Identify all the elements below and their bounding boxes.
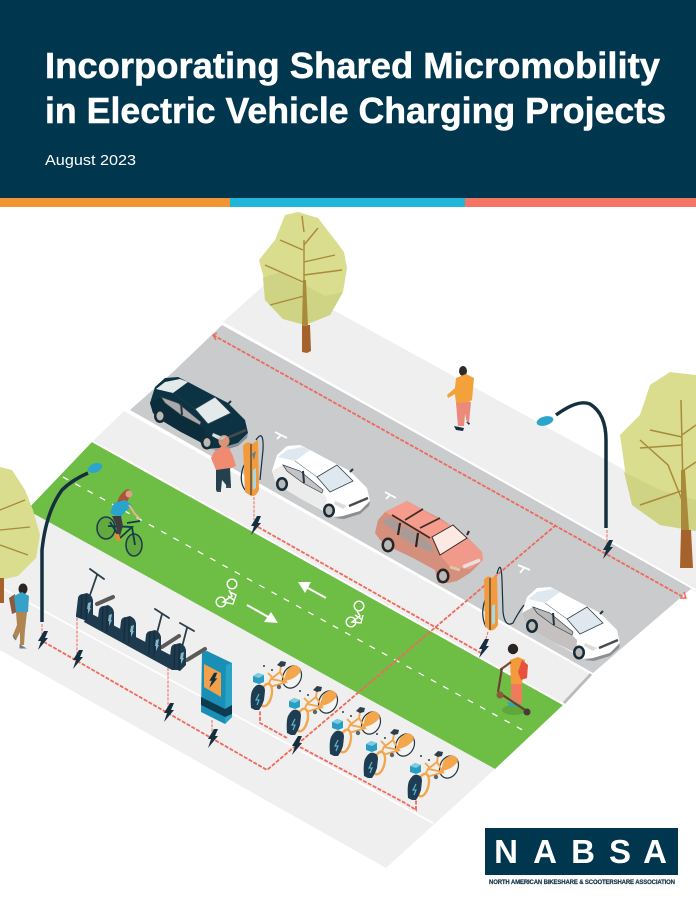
- logo: NABSA: S: [609, 833, 631, 870]
- tree top: [259, 212, 347, 353]
- charger left: [241, 436, 263, 496]
- bolts: [38, 516, 613, 755]
- middle sidewalk: [93, 411, 592, 704]
- far sidewalk: [223, 277, 696, 592]
- colour stripe: [0, 198, 696, 207]
- title: Incorporating Shared Micromobility: [45, 45, 660, 86]
- bike share docks: [251, 661, 462, 800]
- title: in Electric Vehicle Charging Projects: [45, 90, 666, 131]
- scooter poles and bars: [90, 569, 205, 660]
- charging sign: [201, 651, 232, 724]
- logo: NABSA: [485, 828, 678, 886]
- car white: [272, 445, 370, 519]
- street scene: [0, 212, 696, 868]
- logo tagline: NORTH AMERICAN BIKESHARE & SCOOTERSHARE ASSOCIATION: [489, 880, 675, 886]
- car silver charging: [522, 587, 620, 661]
- van: [375, 501, 483, 584]
- car navy: [150, 377, 248, 451]
- header banner: [0, 0, 696, 198]
- bike lane symbols and arrows: [216, 579, 364, 627]
- logo: NABSA: B: [571, 833, 595, 870]
- street lamp right: [536, 403, 606, 528]
- person pink shirt: [211, 435, 236, 492]
- title: [45, 45, 666, 131]
- logo: NABSA: A: [533, 833, 557, 870]
- cyclist: [97, 489, 142, 556]
- roadway: [130, 325, 693, 673]
- bike lane: [27, 442, 563, 769]
- tree right: [620, 372, 696, 568]
- street lamp left: [42, 461, 104, 622]
- scooter rider: [496, 644, 530, 716]
- tree left: [0, 467, 40, 603]
- person with backpack: [9, 584, 29, 648]
- lane centre line: [63, 477, 528, 733]
- sidewalk line: [0, 587, 433, 823]
- logo: NABSA: A: [643, 833, 667, 870]
- date: August 2023: [45, 152, 136, 169]
- parking marks: [275, 432, 530, 573]
- power lines: [44, 335, 685, 810]
- charger right: [483, 567, 524, 630]
- near sidewalk: [0, 510, 495, 868]
- scooter dock: [76, 569, 205, 671]
- logo: NABSA: N: [494, 833, 518, 870]
- person orange jacket: [447, 366, 474, 431]
